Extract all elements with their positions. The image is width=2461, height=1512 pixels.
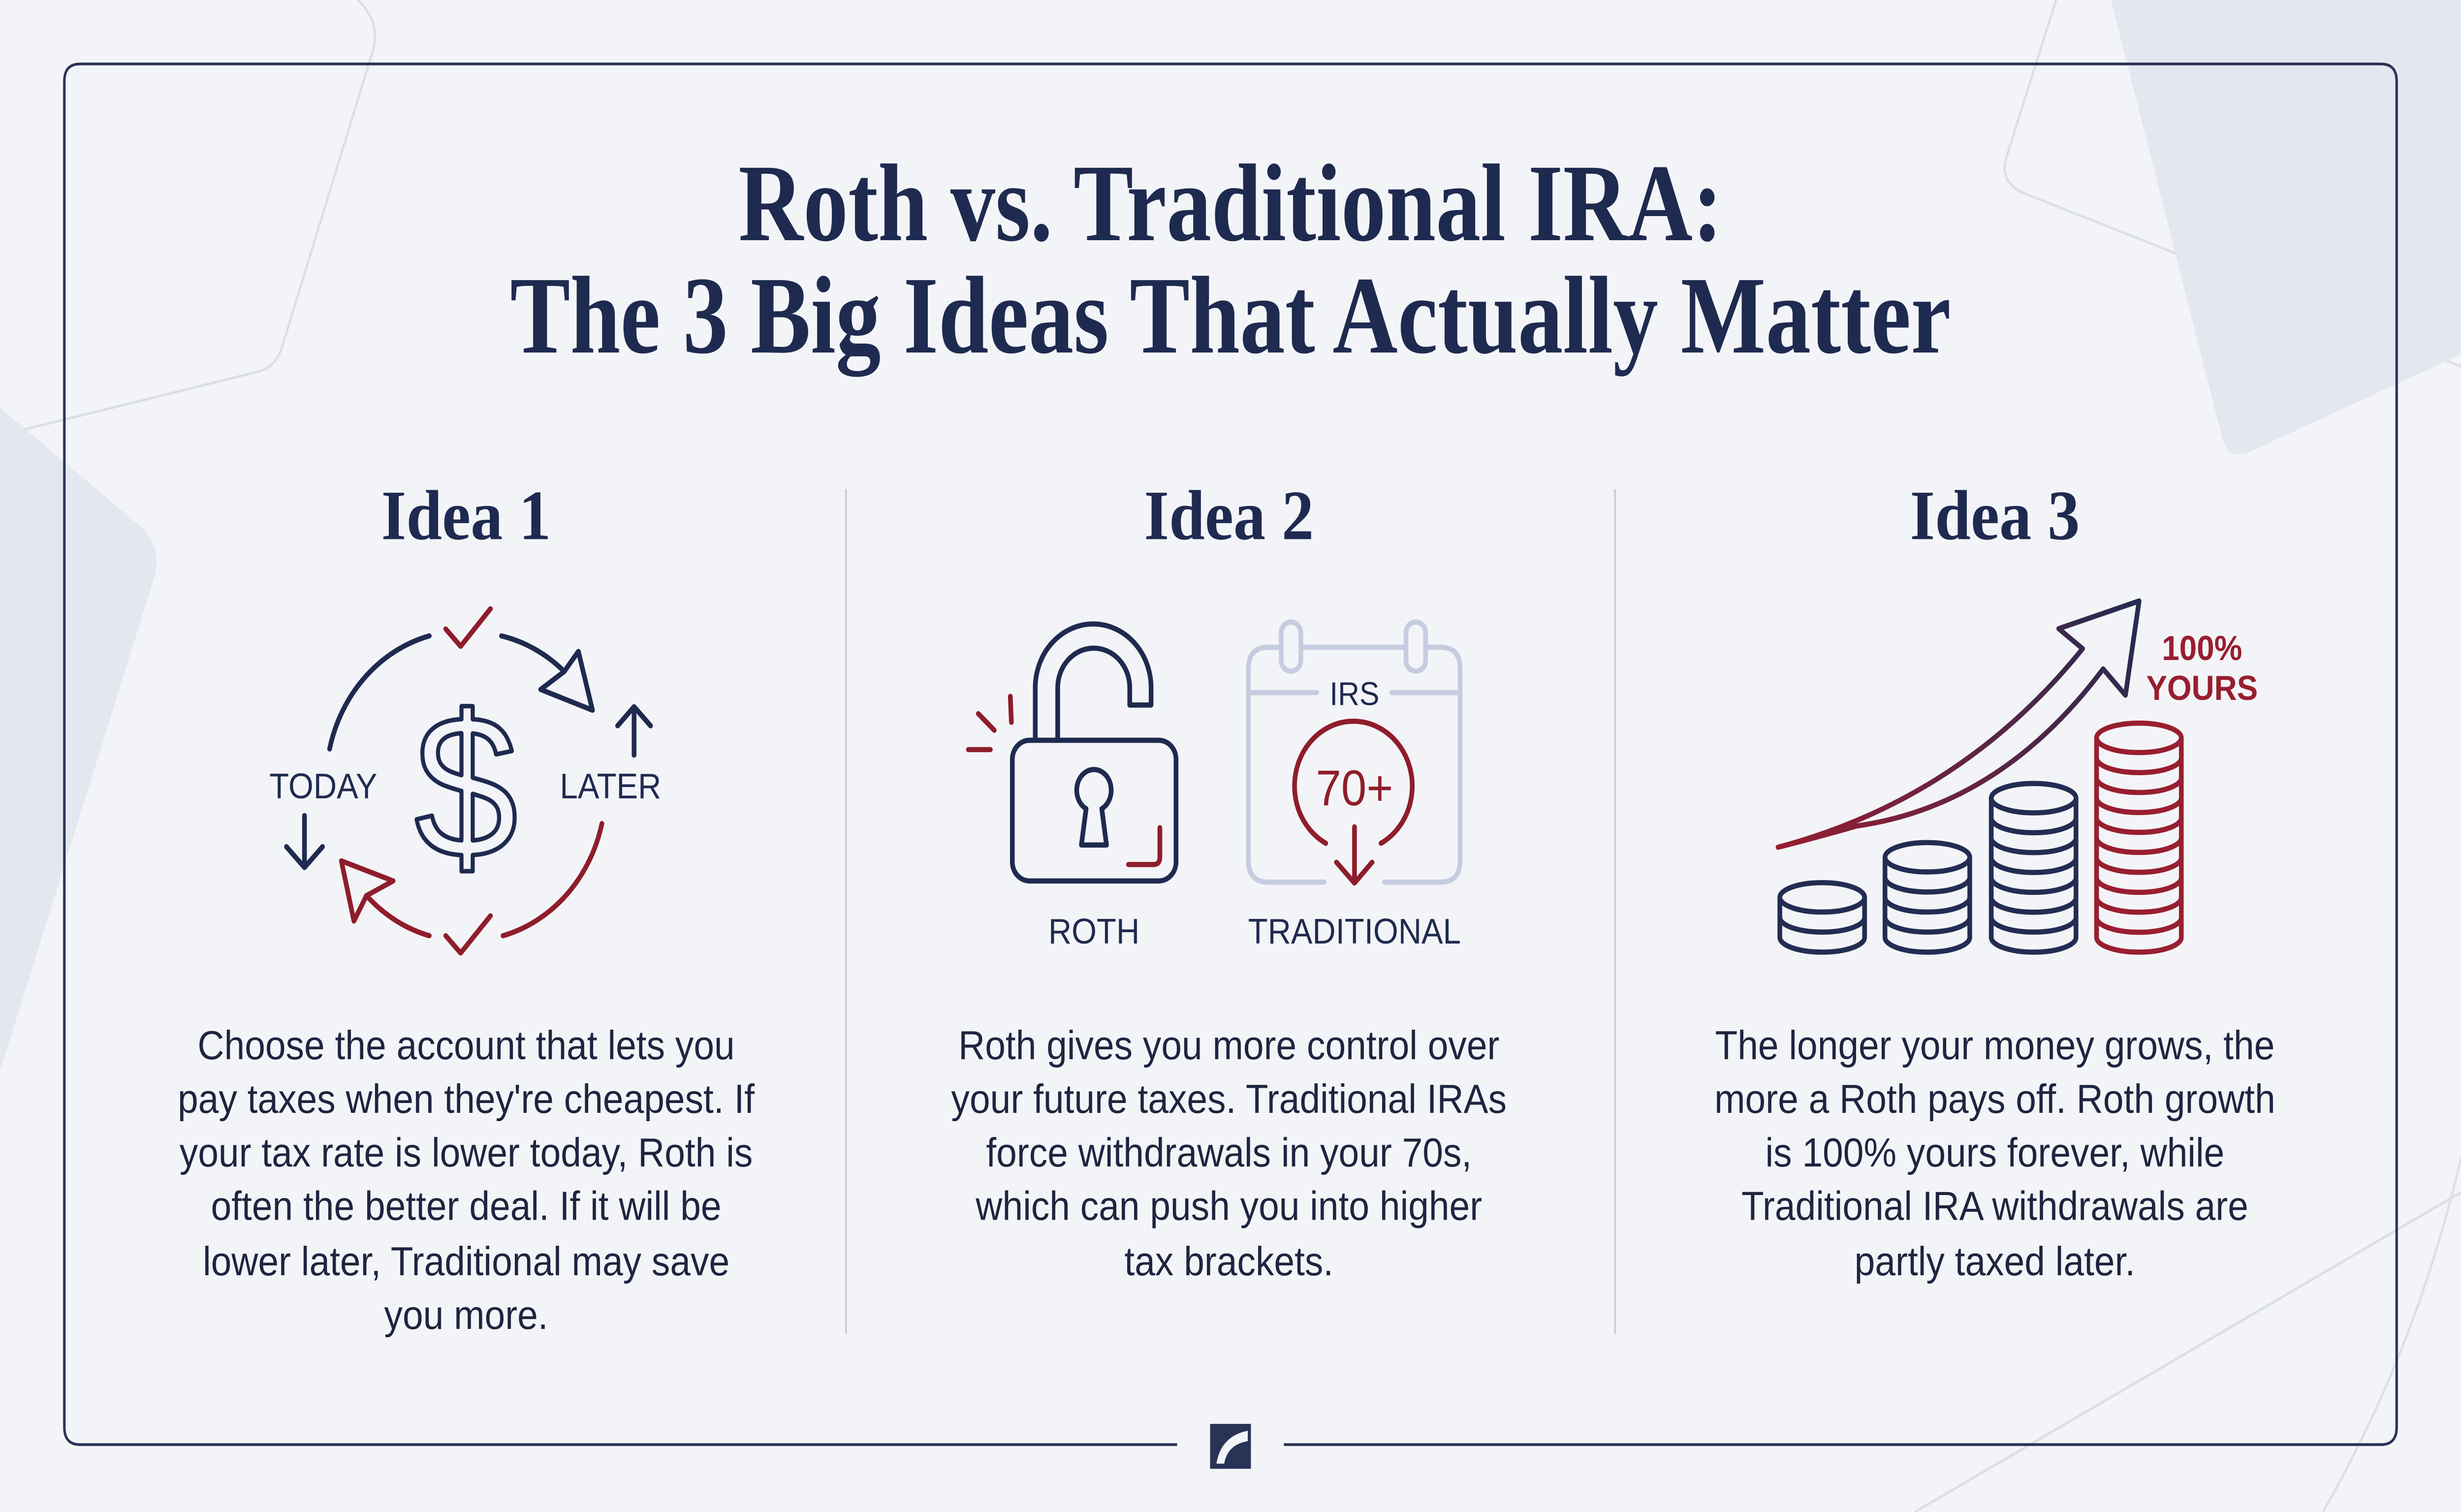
text: idea 2 body: which can push you into higher xyxy=(975,1183,1482,1228)
title xyxy=(510,142,1951,377)
text: idea 3 body: more a Roth pays off. Roth growth xyxy=(1714,1076,2275,1122)
text: idea 1 body: lower later, Traditional may save xyxy=(203,1239,729,1284)
label: 100% yours: 100% xyxy=(2162,629,2242,668)
text: idea 2 body xyxy=(951,1023,1507,1284)
title: Roth vs. Traditional IRA: xyxy=(738,142,1723,264)
text: idea 3 body: The longer your money grows, the xyxy=(1715,1023,2274,1068)
title: The 3 Big Ideas That Actually Matter xyxy=(510,254,1951,377)
label: later: LATER xyxy=(560,766,661,806)
text: idea 1 body: Choose the account that lets you xyxy=(197,1023,735,1068)
heading: idea 2: Idea 2 xyxy=(1144,476,1314,555)
icon: money cycle today/later xyxy=(286,609,651,953)
logo xyxy=(1210,1424,1251,1469)
text: idea 2 body: your future taxes. Traditional IRAs xyxy=(951,1076,1507,1122)
label: IRS: IRS xyxy=(1329,675,1379,712)
text: idea 1 body: your tax rate is lower today, Roth is xyxy=(180,1130,753,1175)
text: idea 3 body: Traditional IRA withdrawals are xyxy=(1741,1183,2248,1228)
icon: open padlock xyxy=(968,624,1176,881)
dividers xyxy=(846,489,1615,1334)
panel: idea 2 xyxy=(951,476,1507,1284)
label: roth: ROTH xyxy=(1048,912,1139,951)
text: idea 2 body: tax brackets. xyxy=(1124,1239,1333,1284)
text: idea 3 body: partly taxed later. xyxy=(1855,1239,2135,1284)
label: traditional: TRADITIONAL xyxy=(1248,912,1461,951)
text: idea 1 body xyxy=(178,1023,755,1338)
label: 100% yours: YOURS xyxy=(2146,669,2258,708)
text: idea 1 body: you more. xyxy=(384,1292,548,1338)
heading: idea 1: Idea 1 xyxy=(381,476,551,555)
icon: growth arrow xyxy=(1778,601,2139,847)
text: idea 1 body: pay taxes when they're cheapest. If xyxy=(178,1076,755,1122)
text: idea 3 body: is 100% yours forever, while xyxy=(1766,1130,2224,1175)
panel: idea 3 xyxy=(1714,476,2275,1284)
heading: idea 3: Idea 3 xyxy=(1910,476,2080,555)
icon: money cycle today/later: $ xyxy=(414,673,518,900)
text: idea 2 body: Roth gives you more control over xyxy=(958,1023,1499,1068)
icon: IRS calendar 70+ xyxy=(1248,622,1460,883)
label: 100% yours xyxy=(2146,629,2258,708)
text: idea 1 body: often the better deal. If it will be xyxy=(211,1183,722,1228)
label: today: TODAY xyxy=(269,766,377,806)
panel: idea 1 xyxy=(178,476,755,1338)
text: idea 3 body xyxy=(1714,1023,2275,1284)
label: 70+: 70+ xyxy=(1316,760,1393,816)
text: idea 2 body: force withdrawals in your 70s, xyxy=(986,1130,1472,1175)
icon: coin stacks xyxy=(1780,723,2181,952)
